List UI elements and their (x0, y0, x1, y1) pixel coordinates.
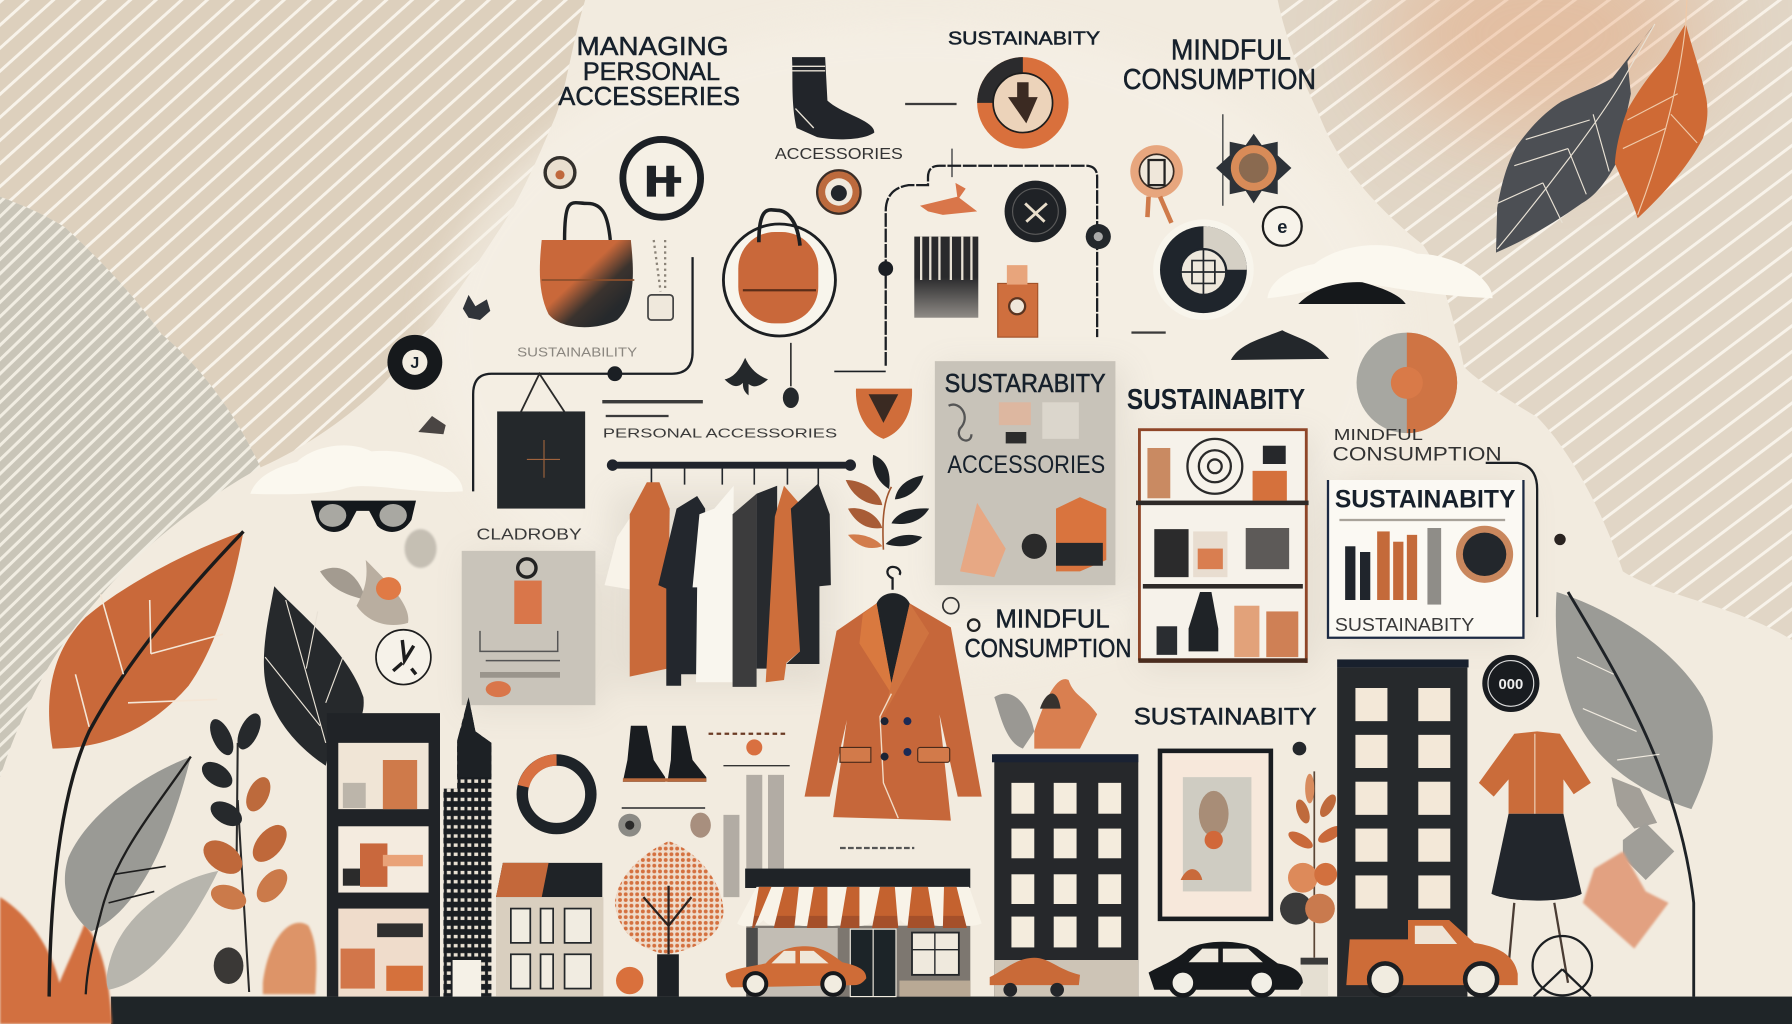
icon: boots pair (623, 726, 706, 782)
orange car (726, 946, 866, 995)
title: mindful consumption (1123, 34, 1316, 96)
poster: wardrobe (462, 551, 595, 705)
heading: sustainability lower: SUSTAINABITY (1134, 704, 1317, 731)
icon: badge J (387, 335, 442, 390)
icon: orange pot (616, 967, 643, 994)
icon: clover (725, 358, 768, 395)
poster: sustainability accessories: ACCESSORIES (947, 451, 1105, 479)
top right dark leaf (1496, 24, 1655, 253)
striped panel: top left (0, 0, 585, 467)
pale grey leaf (107, 871, 218, 990)
heading: sustainability top: SUSTAINABITY (948, 28, 1100, 49)
title: managing personal accessories: PERSONAL (583, 58, 720, 86)
garment: orange tunic (766, 486, 800, 682)
poster: sustainability accessories (935, 361, 1115, 585)
top right orange leaf (1615, 0, 1707, 218)
icon: small button (1086, 224, 1111, 249)
right cloud (1267, 245, 1493, 304)
shelf items middle (1154, 528, 1289, 577)
awning stripes (737, 887, 982, 928)
title: mindful consumption: MINDFUL (1171, 34, 1291, 66)
small accessories row (618, 734, 790, 838)
panel: sustainability chart: SUSTAINABITY (1335, 614, 1474, 635)
grey mini towers (723, 775, 784, 897)
tower (443, 697, 491, 997)
chart: pie disc (1357, 333, 1457, 433)
building: mid brick (992, 754, 1138, 997)
icon: dark medallion (1456, 526, 1513, 583)
dot marker (1554, 534, 1566, 545)
orange pickup truck (1346, 920, 1518, 995)
framed artwork (1160, 751, 1271, 919)
garment: knit grey (733, 494, 757, 687)
house (496, 863, 603, 997)
small eye icon (1293, 742, 1306, 755)
heading: mindful consumption faded: MINDFUL (1334, 427, 1423, 444)
black car (1149, 942, 1303, 995)
garment: orange dress (630, 482, 670, 677)
heading: sustainability shelf: SUSTAINABITY (1127, 384, 1305, 416)
soft shadows (466, 366, 1526, 710)
clothes rack (605, 459, 856, 687)
grey leaf (65, 757, 191, 994)
warm tint: top right (1383, 0, 1703, 137)
panel: sustainability chart: SUSTAINABITY (1335, 485, 1516, 513)
bar chart (1345, 528, 1441, 605)
poster: sustainability accessories: SUSTARABITY (945, 368, 1106, 398)
heading: mindful consumption mid: MINDFUL (995, 603, 1110, 633)
bookcase items (341, 760, 423, 991)
icon: small spiral (943, 598, 979, 631)
icon: eye ring (817, 170, 861, 214)
floral bouquet (994, 679, 1097, 749)
icon: small smile (1263, 207, 1302, 246)
icon: black ring monogram (1005, 181, 1066, 242)
icon: round clock (623, 139, 701, 217)
striped panel: lower left (0, 197, 261, 777)
connector lines (473, 114, 1537, 617)
caption: accessories: ACCESSORIES (775, 146, 903, 163)
icon: boot (792, 57, 874, 139)
corner orange leaves (0, 897, 112, 1024)
icon: tag (648, 240, 673, 320)
small icon: diamond (418, 416, 446, 434)
tree (615, 841, 723, 997)
dark leaf (264, 586, 364, 766)
garment: dark shirt (757, 486, 777, 669)
dark hill (1231, 330, 1329, 360)
heading: mindful consumption mid (965, 603, 1131, 663)
badge: number (1482, 655, 1539, 712)
outfit on stand (1479, 731, 1592, 997)
icon: striped fabric (914, 237, 978, 318)
shelf items bottom (1157, 592, 1298, 657)
striped panel: top right (1278, 0, 1792, 640)
orange plant (197, 710, 316, 994)
wardrobe caption: CLADROBY (477, 526, 582, 543)
panel: sustainability chart (1328, 480, 1523, 638)
background (0, 0, 1792, 777)
icon: orange target (977, 57, 1069, 149)
icon: dark dial (1153, 219, 1254, 320)
small icon left (463, 295, 490, 320)
icon: orange badge (1130, 145, 1183, 223)
icon: sunglasses (311, 501, 416, 532)
gray right leaf (1556, 592, 1713, 997)
heading: mindful consumption mid: CONSUMPTION (965, 633, 1131, 663)
eyeglass row (840, 847, 914, 849)
abstract collage (1583, 777, 1674, 949)
chart: ring (522, 760, 591, 829)
display shelf (1136, 430, 1309, 663)
title: managing personal accessories: ACCESSERIES (558, 81, 740, 111)
icon: clock (376, 630, 431, 685)
storefront (737, 869, 982, 997)
caption: sustainability faded: SUSTAINABILITY (517, 346, 638, 360)
garment: white (693, 486, 734, 682)
left cloud (250, 445, 463, 494)
icon: shopping bag (497, 374, 585, 509)
icon: small smile: e (1277, 216, 1287, 237)
icon: badge J: J (410, 355, 419, 372)
icon: round handbag (723, 210, 835, 336)
icon: orange box (998, 265, 1038, 337)
orange flowering plant (1280, 771, 1345, 997)
badge: number: 000 (1498, 677, 1523, 693)
garment: white sleeve (605, 513, 633, 590)
ground bar (111, 997, 1792, 1024)
shelf items top (1147, 439, 1287, 501)
title: mindful consumption: CONSUMPTION (1123, 64, 1316, 96)
heading: mindful consumption faded (1333, 427, 1502, 466)
icon: sun badge (1216, 134, 1291, 203)
garment: dark tunic (786, 483, 831, 664)
leaf sprig (846, 455, 929, 550)
jacket on hanger (805, 567, 982, 821)
garment: black (658, 496, 705, 686)
bookcase (327, 713, 440, 997)
heading: mindful consumption faded: CONSUMPTION (1333, 444, 1502, 466)
title: managing personal accessories (558, 31, 740, 111)
icon: orange shield (856, 389, 912, 439)
small connector labels (602, 103, 1166, 417)
icon: hanging bead (783, 343, 799, 408)
title: managing personal accessories: MANAGING (577, 31, 729, 61)
large orange leaf (49, 531, 243, 997)
icon: abstract fan (320, 529, 437, 625)
building: tall (1337, 659, 1469, 997)
icon: orange hanger accent (920, 183, 977, 215)
icon: small ring (545, 158, 575, 187)
small orange car (990, 958, 1080, 997)
caption: personal accessories: PERSONAL ACCESSORIES (603, 426, 837, 441)
icon: handbag half and half (540, 203, 634, 327)
